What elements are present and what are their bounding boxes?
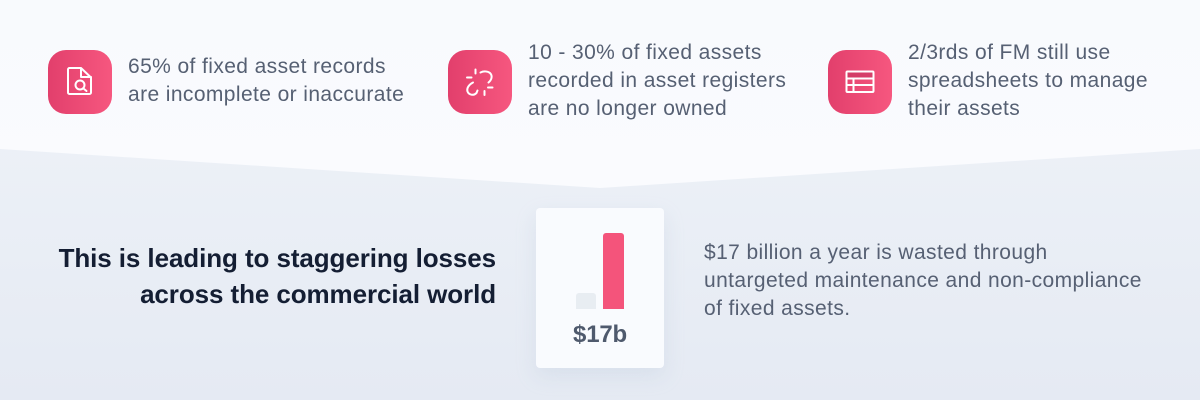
text: no longer owned bbox=[528, 41, 786, 120]
text: incomplete records: 65% of fixed asset records bbox=[128, 55, 386, 78]
text: $17 billion wasted: of fixed assets. bbox=[704, 297, 850, 320]
card: $17b bar chart bbox=[536, 208, 664, 368]
heading: staggering losses: across the commercial world bbox=[140, 279, 496, 309]
text: no longer owned: are no longer owned bbox=[528, 97, 727, 120]
text: $17 billion wasted: untargeted maintenance and non-compliance bbox=[704, 269, 1142, 292]
text: incomplete records bbox=[128, 55, 404, 106]
text: no longer owned: 10 - 30% of fixed assets bbox=[528, 41, 762, 64]
text: spreadsheets: spreadsheets to manage bbox=[908, 69, 1148, 92]
text: incomplete records: are incomplete or inaccurate bbox=[128, 83, 404, 106]
text: $17 billion wasted: $17 billion a year is wasted through bbox=[704, 241, 1048, 264]
heading: staggering losses: This is leading to staggering losses bbox=[59, 243, 496, 273]
heading: staggering losses bbox=[58, 243, 496, 309]
text: $17 billion wasted bbox=[704, 241, 1142, 320]
value label: $17b bbox=[573, 321, 627, 348]
bar: small bbox=[576, 293, 596, 309]
icon: broken link bbox=[448, 50, 512, 114]
text: spreadsheets: their assets bbox=[908, 97, 1020, 120]
icon: file search bbox=[48, 50, 112, 114]
text: spreadsheets bbox=[908, 41, 1148, 120]
text: spreadsheets: 2/3rds of FM still use bbox=[908, 41, 1111, 64]
bar: large bbox=[603, 233, 624, 309]
icon: spreadsheet bbox=[828, 50, 892, 114]
text: no longer owned: recorded in asset registers bbox=[528, 69, 786, 92]
